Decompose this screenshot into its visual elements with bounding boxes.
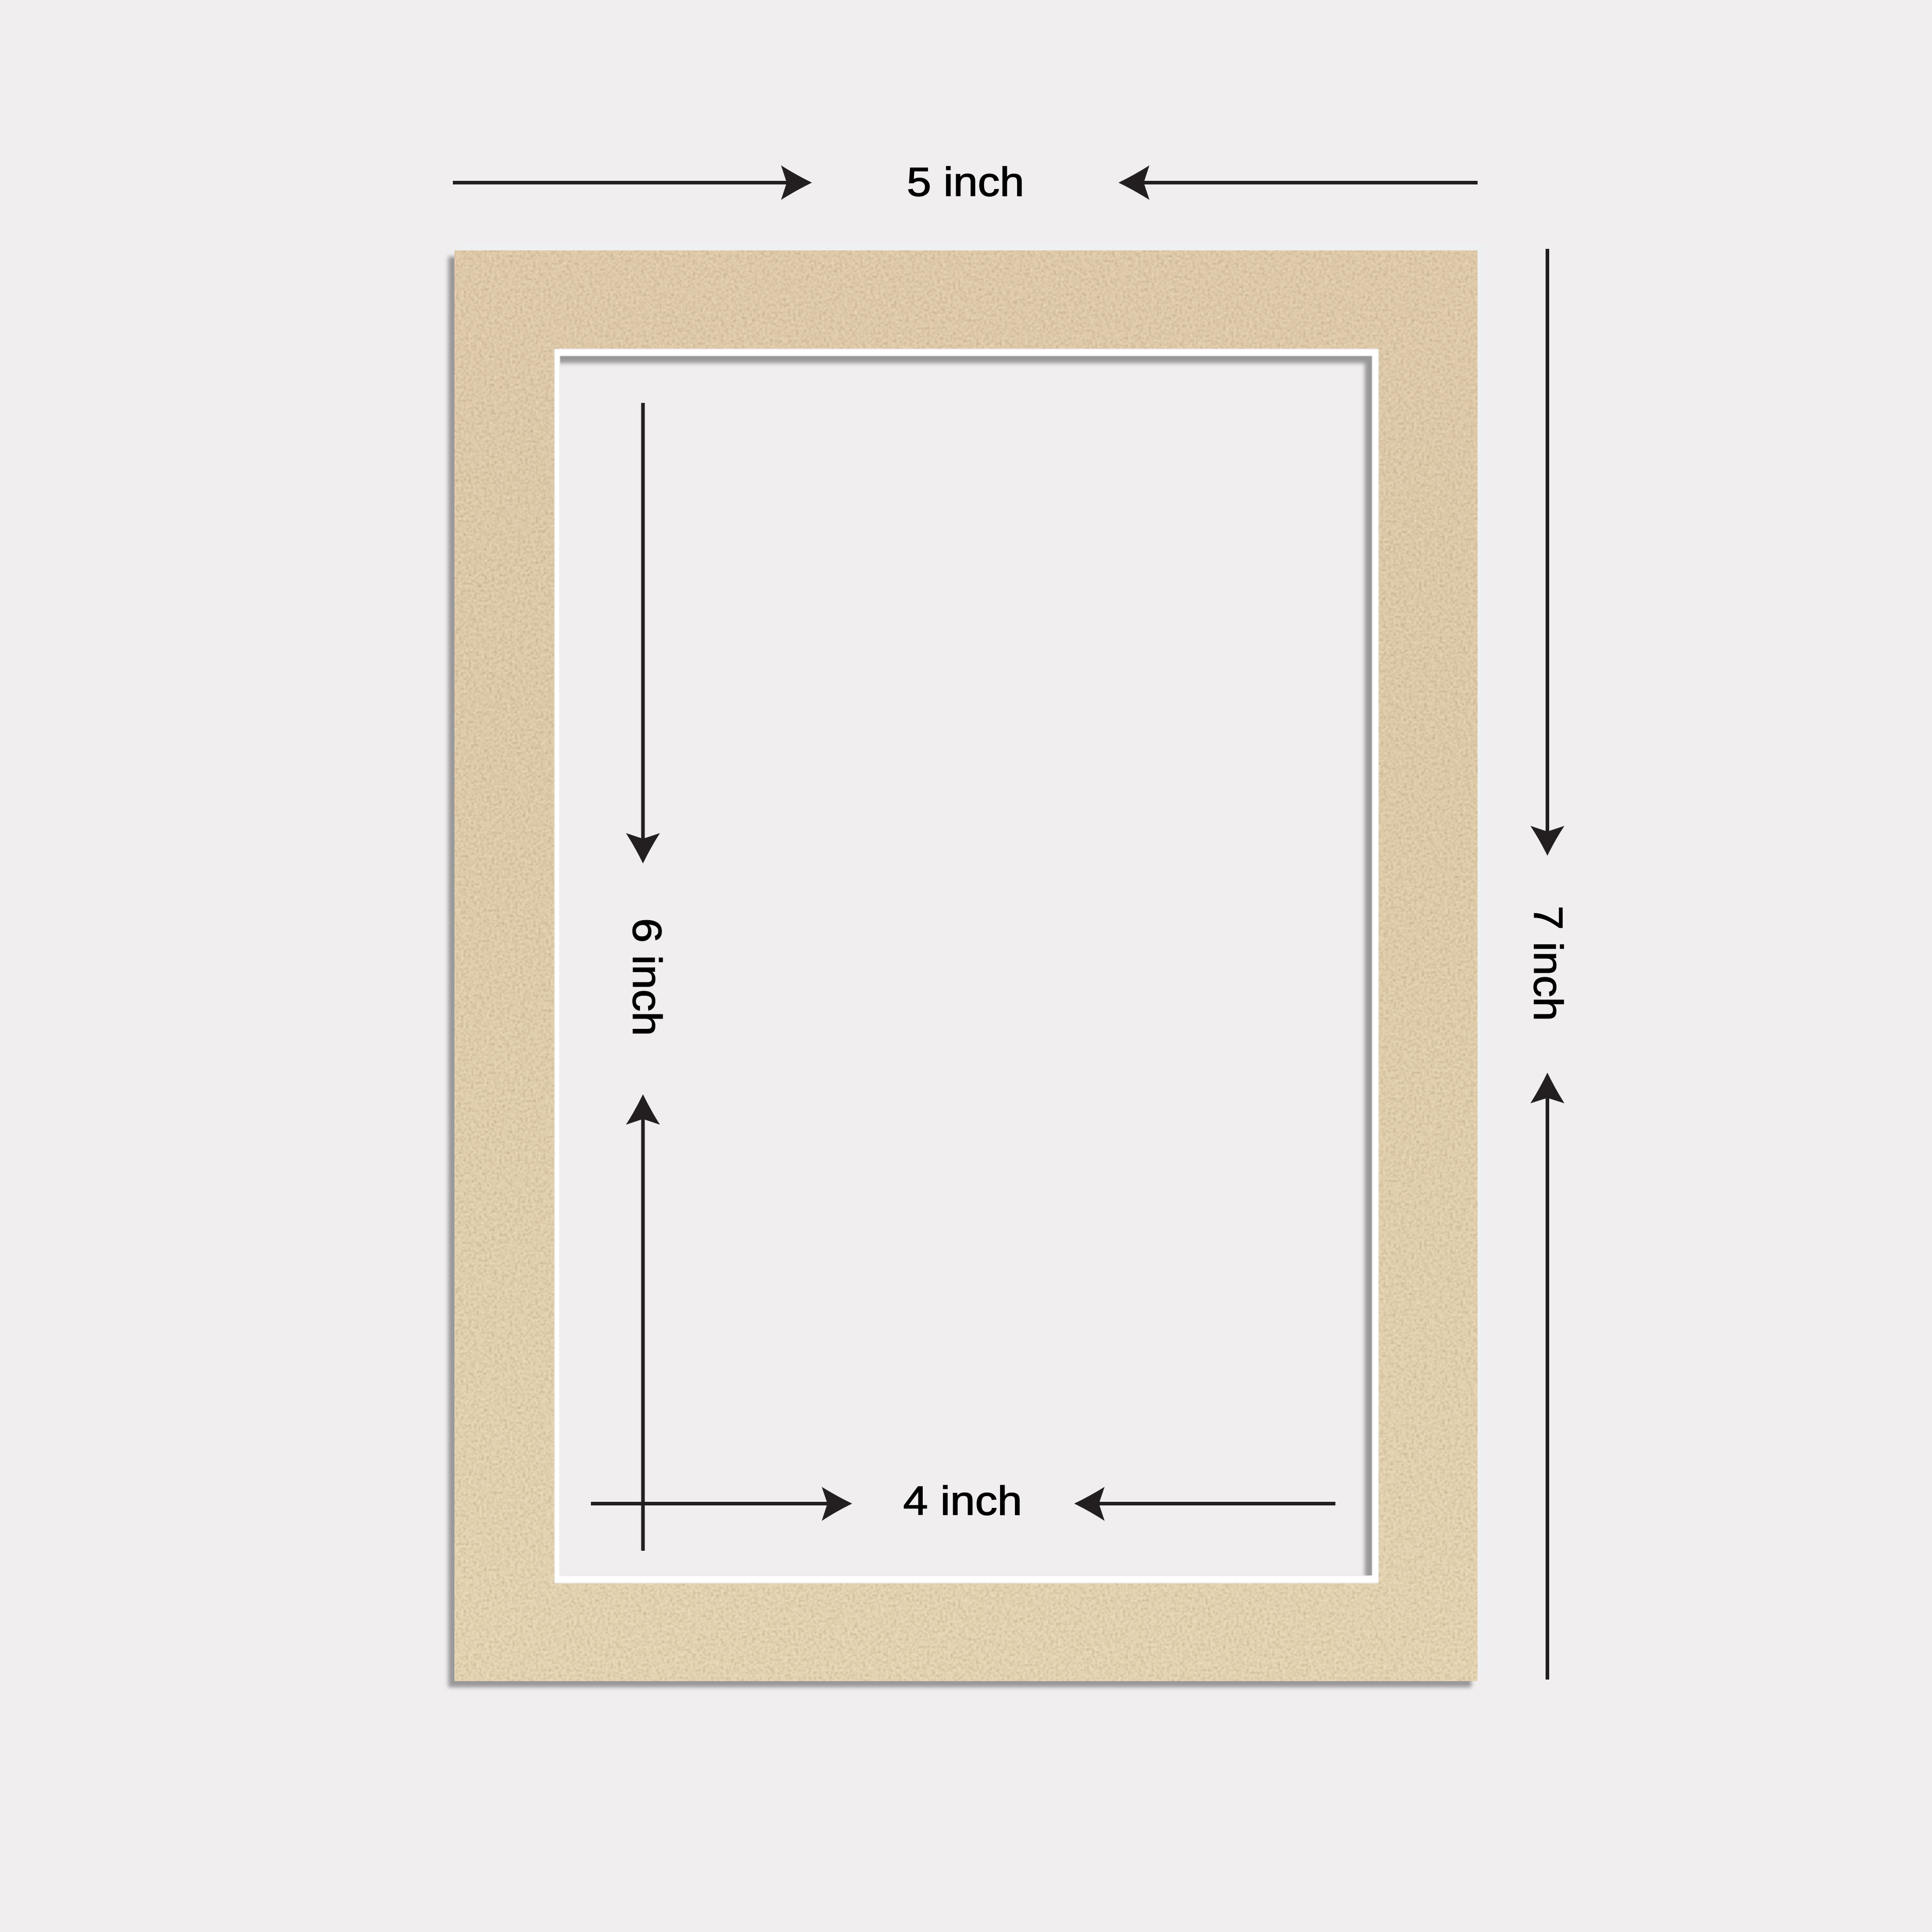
panel: photo mat board — [448, 243, 1486, 1687]
arrow: right pointing left — [1118, 165, 1478, 200]
dimension: opening width 4 inch — [591, 1478, 1335, 1523]
mat highlight glow — [461, 243, 1486, 1674]
window opening backing — [560, 356, 1372, 1575]
label: 7 inch: 7 inch — [1526, 906, 1571, 1021]
dimension: outer height 7 inch — [1526, 249, 1571, 1680]
white bevel — [554, 349, 1379, 1583]
arrow: top pointing down — [1530, 249, 1564, 856]
window inner shadow — [560, 356, 1372, 1575]
arrow: bottom pointing up — [1530, 1073, 1564, 1680]
arrow: right pointing left — [1074, 1487, 1335, 1521]
arrow: left pointing right — [591, 1487, 852, 1521]
arrow: top pointing down — [626, 403, 660, 863]
label: 6 inch: 6 inch — [624, 918, 670, 1036]
label: 4 inch: 4 inch — [903, 1478, 1022, 1523]
arrow: bottom pointing up — [626, 1094, 660, 1551]
label: 5 inch: 5 inch — [907, 159, 1024, 205]
arrow: left pointing right — [453, 165, 812, 200]
mat board surface — [454, 250, 1478, 1681]
mat paper grain — [454, 250, 1478, 1681]
dimension: opening height 6 inch — [624, 403, 670, 1551]
mat drop shadow — [448, 257, 1471, 1687]
dimension: outer width 5 inch — [453, 159, 1478, 205]
